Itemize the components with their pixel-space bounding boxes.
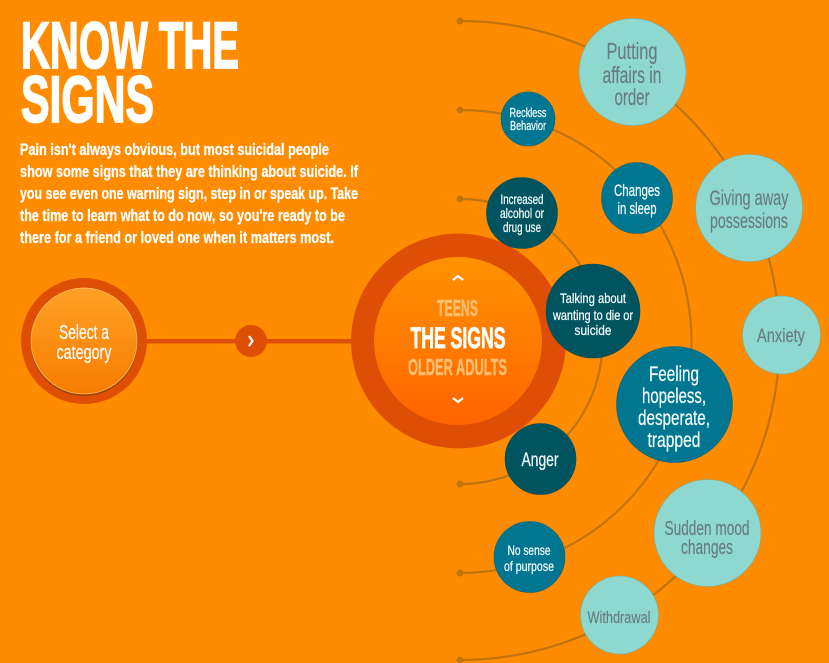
sign: withdrawal: [580, 576, 658, 654]
sign: giving away possessions: [696, 154, 802, 262]
connector arcs: [460, 21, 780, 660]
sign: putting affairs in order: [579, 18, 686, 126]
the signs selector: [351, 234, 566, 448]
title: [21, 8, 239, 136]
icon: down chevron: [453, 398, 463, 402]
sign: feeling hopeless, desperate, trapped: trapped: [648, 429, 700, 452]
sign: talking about wanting to die or suicide: suicide: [574, 322, 612, 338]
arc end dots: [456, 18, 464, 663]
connector line: [140, 339, 360, 344]
sign: no sense of purpose: [494, 522, 565, 592]
the signs selector: THE SIGNS: [410, 322, 506, 355]
select a category button: category: [56, 342, 112, 364]
sign: changes in sleep: [602, 162, 672, 234]
sign: feeling hopeless, desperate, trapped: [616, 346, 732, 462]
intro paragraph: show some signs that they are thinking about suicide. If: [20, 162, 358, 181]
sign: no sense of purpose: No sense: [508, 542, 551, 558]
sign: talking about wanting to die or suicide: Talking about: [560, 290, 626, 306]
intro paragraph: you see even one warning sign, step in or speak up. Take: [20, 184, 358, 203]
sign: sudden mood changes: Sudden mood: [664, 518, 750, 540]
sign: giving away possessions: Giving away: [710, 187, 789, 210]
sign: anxiety: Anxiety: [757, 326, 805, 347]
select a category button: [21, 278, 147, 404]
sign: no sense of purpose: of purpose: [504, 558, 554, 574]
icon: chevron button: [235, 325, 267, 357]
sign: increased alcohol or drug use: [486, 178, 558, 248]
intro paragraph: [20, 140, 358, 247]
sign: talking about wanting to die or suicide: wanting to die or: [552, 307, 633, 323]
sign: withdrawal: Withdrawal: [588, 608, 650, 627]
sign: putting affairs in order: affairs in: [602, 62, 662, 88]
sign: increased alcohol or drug use: alcohol or: [500, 205, 544, 221]
title: SIGNS: [21, 62, 154, 136]
sign: anxiety: [742, 296, 820, 374]
intro paragraph: the time to learn what to do now, so you're ready to be: [20, 206, 345, 225]
title: KNOW THE: [21, 8, 239, 82]
sign: increased alcohol or drug use: drug use: [503, 219, 541, 235]
icon: up chevron: [453, 276, 463, 280]
sign: talking about wanting to die or suicide: [546, 264, 640, 358]
select a category button: Select a: [59, 322, 110, 344]
sign: changes in sleep: in sleep: [618, 199, 656, 218]
sign: feeling hopeless, desperate, trapped: hopeless,: [642, 385, 706, 408]
sign: putting affairs in order: Putting: [606, 38, 658, 64]
sign: reckless behavior: Behavior: [510, 118, 546, 133]
intro paragraph: Pain isn't always obvious, but most suicidal people: [20, 140, 329, 159]
sign: putting affairs in order: order: [614, 84, 650, 110]
sign: feeling hopeless, desperate, trapped: desperate,: [638, 407, 710, 430]
sign: reckless behavior: [501, 92, 555, 146]
sign: sudden mood changes: [654, 480, 761, 586]
sign: giving away possessions: possessions: [710, 210, 788, 233]
intro paragraph: there for a friend or loved one when it matters most.: [20, 228, 334, 247]
sign: reckless behavior: Reckless: [510, 105, 547, 120]
sign: increased alcohol or drug use: Increased: [500, 191, 544, 207]
sign: feeling hopeless, desperate, trapped: Feeling: [649, 363, 699, 386]
the signs selector: TEENS: [437, 295, 478, 321]
sign: anger: Anger: [522, 450, 559, 471]
the signs selector: OLDER ADULTS: [408, 354, 507, 380]
sign: changes in sleep: Changes: [614, 181, 660, 200]
sign: sudden mood changes: changes: [681, 537, 733, 559]
sign: anger: [505, 424, 576, 494]
